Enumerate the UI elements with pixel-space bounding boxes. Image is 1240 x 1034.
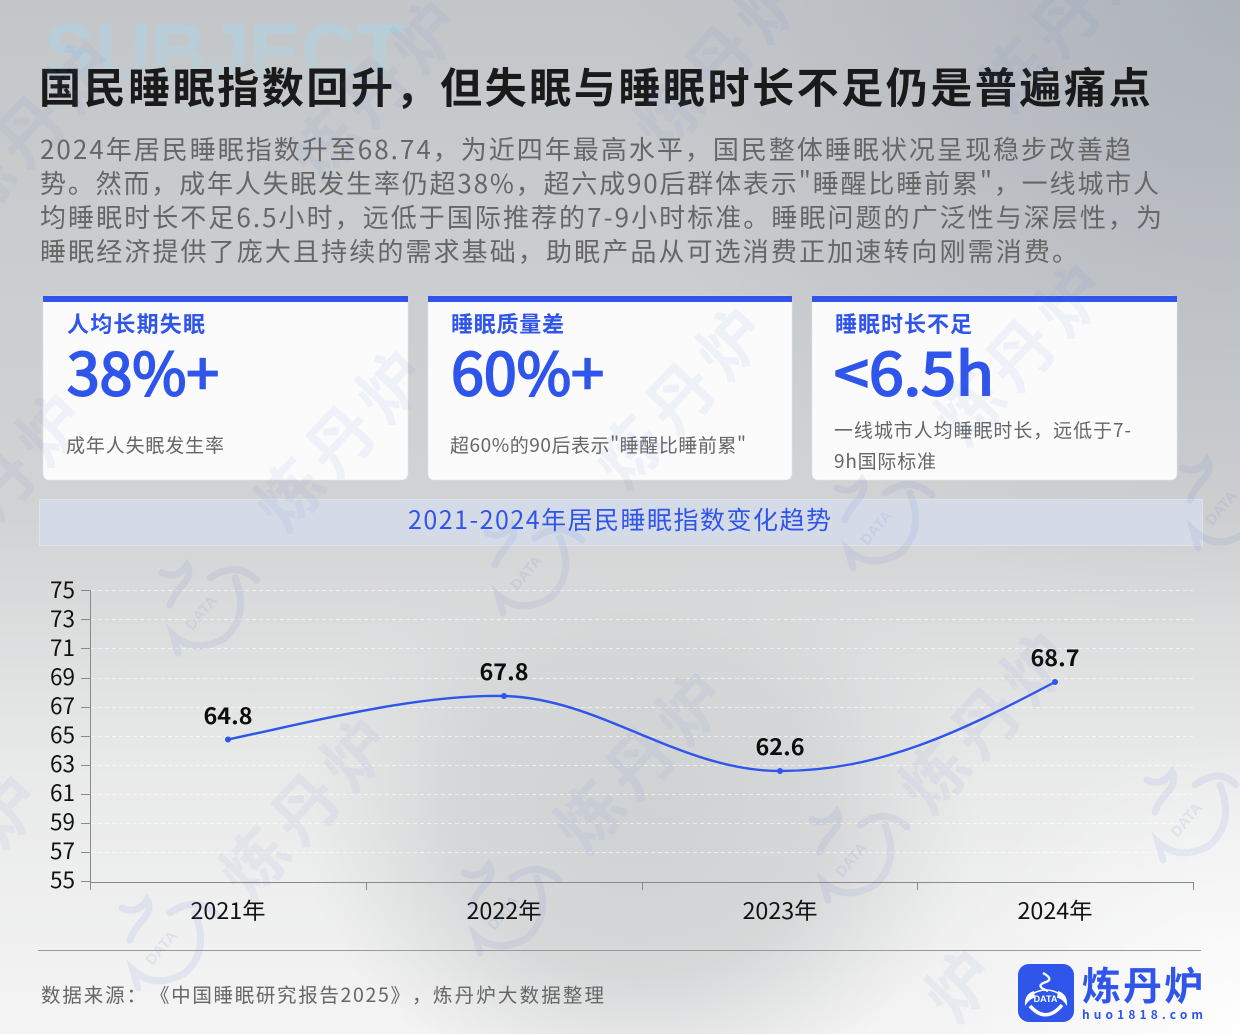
y axis labels: 73 [50, 602, 75, 634]
axes [81, 590, 1194, 890]
card: 睡眠时长不足 [812, 296, 1177, 480]
data points [225, 679, 1058, 774]
x axis labels: 2022年 [466, 894, 542, 926]
card: 睡眠时长不足: 一线城市人均睡眠时长，远低于7- [834, 416, 1131, 443]
card: 睡眠时长不足: 9h国际标准 [834, 447, 936, 474]
watermark pattern: DATA rings: DATA [507, 552, 546, 594]
watermark pattern: DATA rings [122, 460, 1240, 988]
watermark pattern: 炼丹炉 [569, 278, 791, 506]
logo url: huo1818.com [1082, 1006, 1203, 1023]
watermark pattern: 炼丹炉 [194, 689, 416, 917]
footer divider [38, 950, 1201, 951]
logo [1018, 956, 1203, 1023]
y axis labels: 63 [50, 747, 75, 779]
watermark pattern: DATA rings: DATA [142, 927, 181, 969]
watermark pattern: DATA rings: DATA [857, 507, 896, 549]
y axis labels: 65 [50, 718, 75, 750]
card: 睡眠质量差: 超60%的90后表示"睡醒比睡前累" [450, 431, 746, 458]
card: 睡眠时长不足: <6.5h [834, 328, 994, 412]
y axis labels: 67 [50, 689, 75, 721]
data labels: 68.7 [1030, 641, 1080, 673]
card: 人均长期失眠: 38%+ [67, 328, 219, 412]
background word: SUBJECT: SUBJECT [44, 9, 403, 95]
x axis labels [190, 894, 1092, 926]
card: 睡眠时长不足: 睡眠时长不足 [835, 307, 972, 339]
card: 人均长期失眠: 人均长期失眠 [67, 307, 205, 339]
y axis labels: 55 [50, 863, 75, 895]
watermark pattern: DATA rings: DATA [1167, 799, 1206, 841]
y axis labels: 69 [50, 660, 75, 692]
chart title banner [40, 500, 1202, 546]
summary paragraph: 均睡眠时长不足6.5小时，远低于国际推荐的7-9小时标准。睡眠问题的广泛性与深层性，为 [40, 198, 1164, 235]
summary paragraph: 2024年居民睡眠指数升至68.74，为近四年最高水平，国民整体睡眠状况呈现稳步改善趋 [40, 130, 1133, 167]
watermark pattern: DATA rings: DATA [182, 592, 221, 634]
y axis labels: 71 [50, 631, 75, 663]
chart title banner: 2021-2024年居民睡眠指数变化趋势 [408, 501, 831, 537]
source note: 炼丹炉大数据整理 [433, 979, 604, 1008]
x axis labels: 2023年 [742, 894, 818, 926]
grid lines [91, 590, 1193, 852]
watermark pattern: DATA rings: DATA [832, 839, 871, 881]
line chart [50, 573, 1194, 926]
card: 睡眠质量差: 睡眠质量差 [451, 307, 564, 339]
card: 人均长期失眠: 成年人失眠发生率 [66, 431, 224, 458]
source note: ， [412, 979, 432, 1008]
summary paragraph [40, 130, 1164, 269]
source note [41, 979, 604, 1008]
data labels [204, 641, 1080, 762]
y axis labels: 57 [50, 834, 75, 866]
watermark pattern: 炼丹炉 [529, 643, 751, 871]
y axis labels: 59 [50, 805, 75, 837]
watermark pattern: 炼丹炉 [874, 603, 1096, 831]
source note: 数据来源： [41, 979, 146, 1008]
data labels: 64.8 [204, 699, 252, 731]
watermark pattern: 炼丹炉 [909, 235, 1131, 463]
logo icon [1018, 964, 1074, 1022]
card: 人均长期失眠 [43, 296, 408, 480]
y axis labels [50, 573, 75, 895]
summary paragraph: 睡眠经济提供了庞大且持续的需求基础，助眠产品从可选消费正加速转向刚需消费。 [40, 232, 1080, 269]
y axis labels: 75 [50, 573, 75, 605]
watermark pattern: 炼丹炉 [229, 321, 451, 549]
logo wordmark: 炼丹炉 [1082, 956, 1203, 1012]
watermark pattern: DATA rings: DATA [484, 892, 523, 934]
y axis labels: 61 [50, 776, 75, 808]
data labels: 62.6 [756, 730, 805, 762]
card: 睡眠质量差 [428, 296, 792, 480]
source note: 《中国睡眠研究报告2025》 [150, 979, 410, 1008]
trend line [228, 682, 1055, 771]
watermark pattern: DATA rings: DATA [1202, 487, 1240, 529]
x axis labels: 2024年 [1018, 894, 1092, 926]
title: 国民睡眠指数回升，但失眠与睡眠时长不足仍是普遍痛点 [39, 55, 1153, 116]
summary paragraph: 势。然而，成年人失眠发生率仍超38%，超六成90后群体表示"睡醒比睡前累"，一线城市人 [40, 164, 1161, 201]
x axis labels: 2021年 [190, 894, 266, 926]
data labels: 67.8 [480, 655, 528, 687]
logo icon: DATA [1034, 994, 1058, 1004]
card: 睡眠质量差: 60%+ [451, 328, 604, 412]
